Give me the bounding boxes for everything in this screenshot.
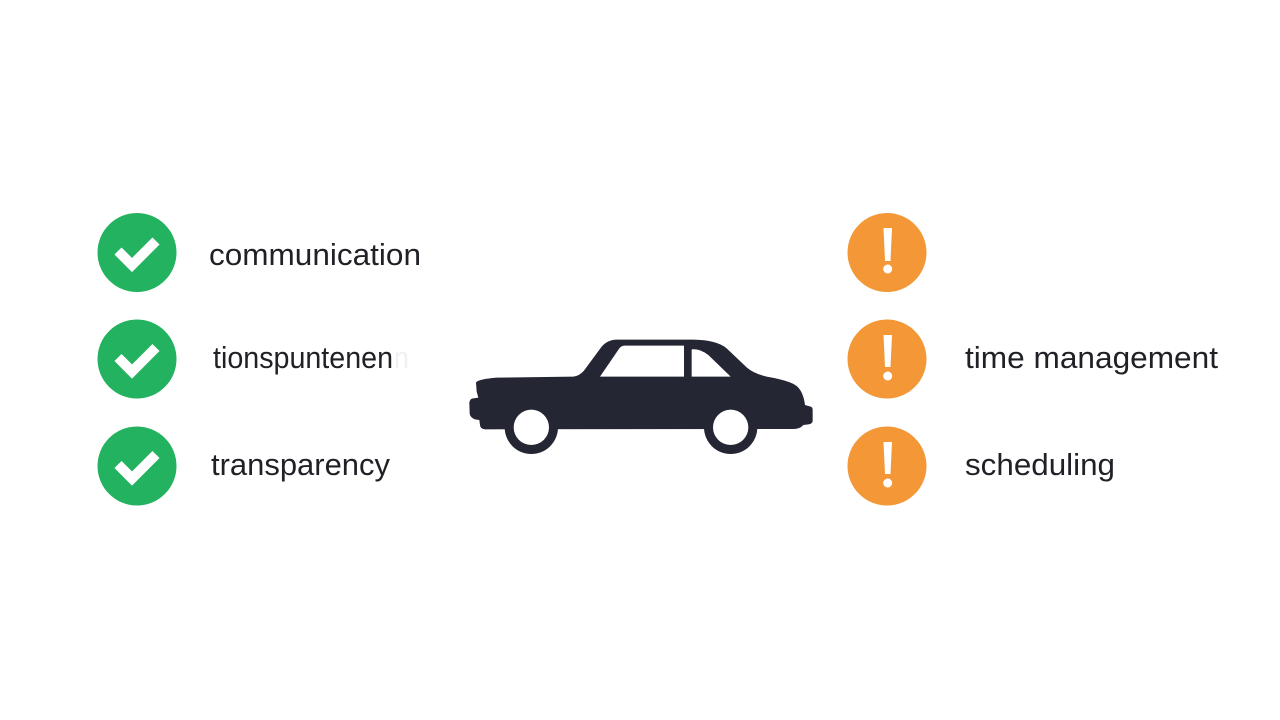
icon: check 1 (98, 213, 176, 292)
label: scheduling: scheduling (965, 447, 1115, 482)
icon: check 3 (98, 426, 176, 506)
label: garbled text: n (394, 340, 409, 375)
label: transparency: transparency (211, 447, 390, 482)
panel: weaknesses (848, 213, 1218, 506)
label: time management: time management (965, 340, 1218, 375)
icon: warning 1 (848, 213, 926, 292)
icon: warning 3 (848, 426, 926, 506)
icon: car (469, 340, 813, 454)
label: garbled text: tionspuntenen (213, 340, 393, 375)
icon: check 2 (98, 320, 176, 398)
label: communication: communication (209, 237, 421, 272)
panel: strengths (98, 213, 421, 506)
icon: warning 2 (848, 320, 926, 398)
